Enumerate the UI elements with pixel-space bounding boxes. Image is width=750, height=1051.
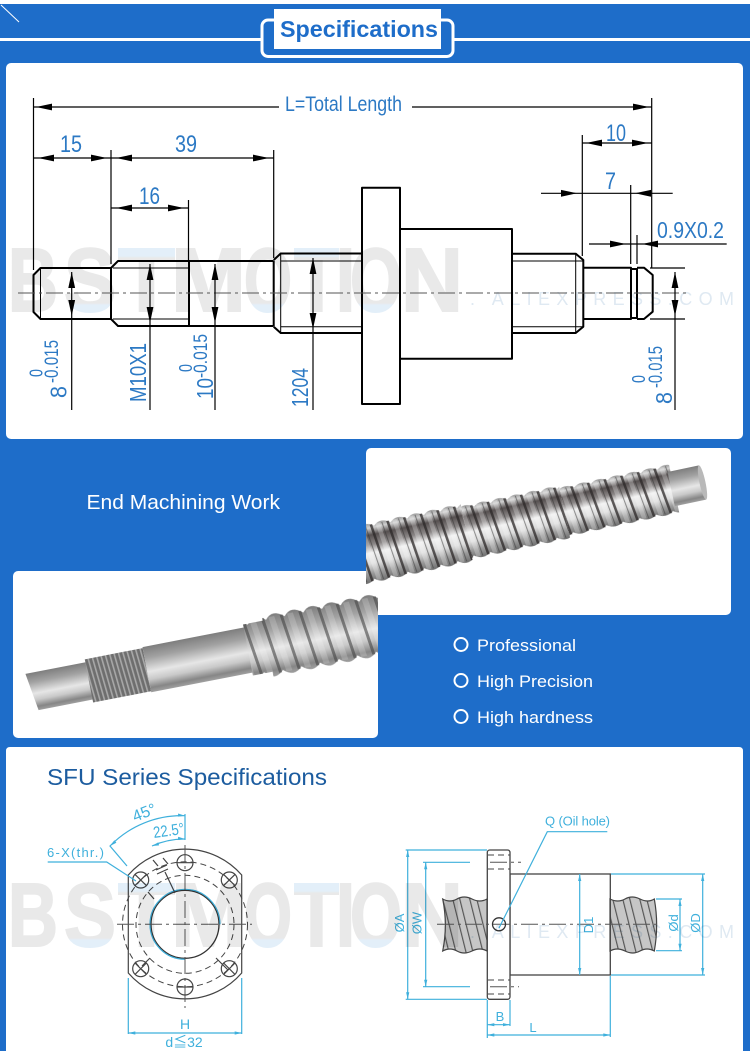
- shaft outline: [34, 188, 653, 404]
- watermark: BSTMOTION: T: [118, 231, 175, 331]
- dimension: 7: 7: [605, 168, 616, 195]
- watermark: BSTMOTION: I: [336, 231, 355, 331]
- diameter: 10 -0.015: -0.015: [191, 334, 212, 378]
- diameter: 8 -0.015 right: 0: [629, 375, 649, 383]
- watermark: aliexpress: . ALIEXPRESS.COM: [470, 289, 734, 309]
- watermark: BSTMOTION: O: [244, 231, 292, 331]
- watermark: BSTMOTION: O: [350, 866, 402, 966]
- nut body: [510, 874, 610, 975]
- screw right: [610, 897, 657, 953]
- diameter: 8 -0.015 right: -0.015: [646, 346, 667, 388]
- dimension: B: [487, 1000, 510, 1038]
- heading band: Specifications: [0, 9, 750, 56]
- metric thread: [85, 648, 151, 703]
- leader: Q (Oil hole): Q (Oil hole): [545, 814, 610, 829]
- watermark: BSTMOTION: T: [294, 231, 339, 331]
- dimension: D1: D1: [581, 917, 596, 933]
- heading: SFU Series Specifications: SFU Series Specifications: [47, 764, 327, 790]
- drawing: ball nut side view: [437, 850, 659, 999]
- watermark: BSTMOTION: N: [401, 866, 463, 966]
- dimension: 15: [34, 131, 111, 264]
- dimension: 15: 15: [60, 131, 82, 158]
- dimension: 16: [111, 183, 188, 260]
- oil hole: [492, 918, 506, 931]
- leader: Q (Oil hole): [499, 814, 610, 928]
- dimension: total length: [34, 93, 652, 270]
- leader: 6-X (thr.): [47, 845, 136, 881]
- diameter: 10 -0.015: [176, 264, 218, 410]
- flange: [487, 850, 510, 999]
- watermark: BSTMOTION: T: [118, 866, 175, 966]
- watermark: aliexpress: . ALIEXPRESS.COM: [470, 922, 734, 942]
- diameter: M10X1: [125, 264, 153, 410]
- bullet: High Precision: High Precision: [477, 672, 593, 691]
- diameter: 1204: [287, 258, 316, 410]
- dimension: B: B: [496, 1009, 504, 1024]
- screw left: [443, 897, 487, 953]
- photo panel: machined shaft end: [13, 571, 401, 738]
- angle dimension: 22.5 degrees: 22.5°: [152, 821, 185, 842]
- dimension: 10: 10: [606, 120, 626, 147]
- diameter: M10X1: M10X1: [125, 343, 151, 402]
- bullet: Professional: Professional: [477, 636, 576, 655]
- watermark: BSTMOTION: O: [244, 866, 292, 966]
- watermark: BSTMOTION: [8, 231, 463, 331]
- dimension: ØD: [611, 874, 705, 975]
- drawing: flange front view: [117, 845, 252, 1008]
- decorative corner slash: [1, 5, 19, 22]
- ball thread: [243, 620, 275, 676]
- label: L=Total Length: L=Total Length: [285, 93, 402, 116]
- dimension: ØA: [392, 850, 487, 999]
- watermark: BSTMOTION: O: [350, 231, 402, 331]
- dimension: L: L: [529, 1020, 537, 1035]
- angle dimension: 45 degrees: [109, 801, 185, 866]
- bullet list: [454, 636, 593, 727]
- journal: [25, 662, 94, 711]
- dimension: 39: [111, 131, 274, 258]
- dimension: 16: 16: [139, 183, 160, 210]
- watermark: BSTMOTION: M: [171, 231, 246, 331]
- dimension: Ød: [656, 899, 682, 951]
- diameter: 8 -0.015 right: [629, 268, 685, 410]
- bolt holes: [133, 855, 237, 995]
- watermark: BSTMOTION: B: [8, 231, 58, 331]
- dimension: D1: [578, 874, 596, 975]
- panel: SFU series specifications: [6, 747, 743, 1051]
- watermark: BSTMOTION: N: [401, 231, 463, 331]
- dimension: 39: 39: [175, 131, 197, 158]
- diameter: 10 -0.015: 10: [192, 378, 218, 399]
- watermark: BSTMOTION: I: [336, 866, 355, 966]
- diameter: 8 -0.015 left: 0: [27, 369, 47, 377]
- angle dimension: 22.5 degrees: [152, 821, 185, 848]
- panel: end dimension drawing: [6, 63, 743, 439]
- dimension: 0.9X0.2: 0.9X0.2: [657, 217, 724, 243]
- watermark: BSTMOTION: S: [64, 231, 116, 331]
- dimension: L: [487, 976, 610, 1037]
- photo panel: threaded screw, full length: [366, 448, 731, 615]
- dimension: ØW: ØW: [410, 911, 424, 934]
- watermark: BSTMOTION: [8, 866, 463, 966]
- dimension: H, d≦32: H: [180, 1016, 190, 1032]
- dimension: ØA: ØA: [392, 913, 407, 932]
- leader: 6-X (thr.): 6-X(thr.): [47, 845, 104, 860]
- diameter: 10 -0.015: 0: [176, 364, 196, 372]
- text: End Machining Work: End Machining Work: [86, 492, 281, 514]
- diameter: 8 -0.015 left: [27, 272, 75, 410]
- bullet: High hardness: High hardness: [477, 708, 593, 727]
- dimension: 7: [541, 168, 673, 264]
- watermark: BSTMOTION: M: [171, 866, 246, 966]
- dimension: Ød: Ød: [666, 914, 681, 932]
- dimension: ØD: ØD: [688, 913, 703, 933]
- centre line: [18, 292, 687, 294]
- photo: threaded screw: [366, 464, 708, 584]
- watermark: BSTMOTION: B: [8, 866, 58, 966]
- diameter: 8 -0.015 left: -0.015: [42, 340, 63, 383]
- watermark: BSTMOTION: S: [64, 866, 116, 966]
- dimension: H, d≦32: [128, 978, 242, 1050]
- diameter: 8 -0.015 right: 8: [651, 392, 677, 404]
- diameter: 1204: 1204: [287, 368, 313, 407]
- dimension: 0.9X0.2: [589, 217, 727, 264]
- dimension: H, d≦32: d≦32: [165, 1034, 203, 1050]
- angle dimension: 45 degrees: 45°: [130, 801, 159, 826]
- shaft: [142, 627, 254, 692]
- diameter: 8 -0.015 left: 8: [46, 386, 72, 398]
- dimension: 10: [582, 120, 652, 256]
- watermark: BSTMOTION: T: [294, 866, 339, 966]
- dimension: ØW: [410, 862, 470, 987]
- heading text: Specifications: [280, 16, 438, 42]
